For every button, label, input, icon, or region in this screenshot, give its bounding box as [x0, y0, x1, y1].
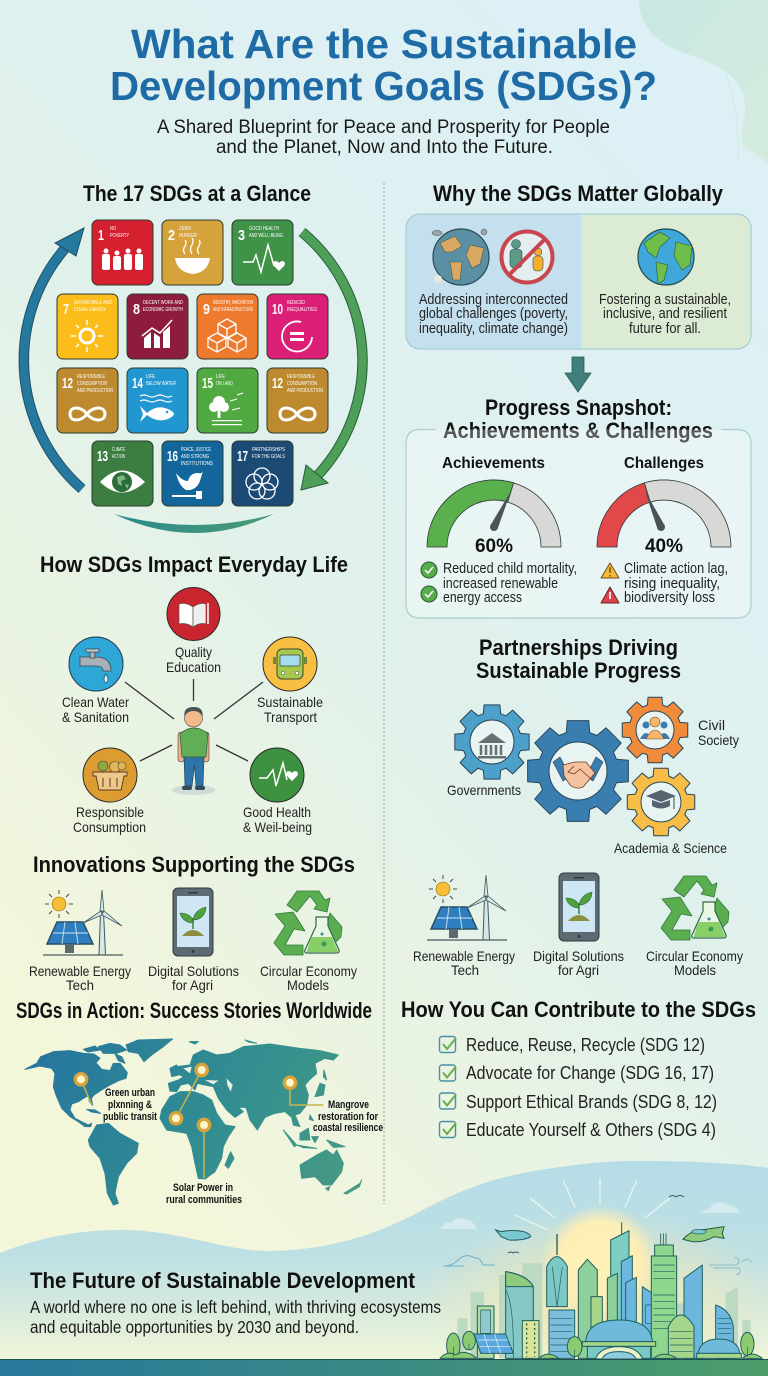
text: fostering a future — [599, 291, 731, 337]
text: addressing challenges — [419, 291, 568, 337]
icon: renewable energy — [427, 875, 507, 940]
label: renewable energy: Renewable Energy — [413, 948, 515, 964]
clouds and birds — [441, 1202, 740, 1229]
label: digital solutions: Digital Solutions — [533, 948, 624, 964]
plane: left — [496, 1230, 531, 1240]
label: good health: Good Health — [243, 804, 311, 820]
label: responsible consumption: Responsible — [76, 804, 144, 820]
label: sustainable transport — [257, 694, 323, 725]
text: fostering a future: Fostering a sustainable, — [599, 291, 731, 308]
label: good health — [243, 804, 312, 835]
tile: SDG 7: CLEAN ENERGY — [74, 307, 107, 313]
title: What Are the Sustainable — [131, 21, 637, 67]
tile: SDG 7: AFFORDABLE AND — [74, 300, 112, 306]
gauge: challenges — [597, 455, 731, 557]
icon: person — [172, 707, 216, 795]
label: circular economy: Models — [287, 977, 329, 993]
label: circular economy — [646, 948, 743, 978]
list: achievements — [421, 560, 577, 606]
tile: SDG 3 — [232, 220, 293, 285]
callout: mangrove restoration: coastal resilience — [313, 1122, 383, 1134]
tile: SDG 12: 12 — [62, 375, 73, 392]
heading: Partnerships: Partnerships Driving — [479, 635, 678, 660]
text: fostering a future: inclusive, and resilient — [603, 305, 728, 322]
list: challenges: Climate action lag, — [624, 560, 728, 577]
tile: SDG 16: INSTITUTIONS — [181, 461, 214, 467]
callout: green urban planning: Green urban — [105, 1087, 155, 1099]
icon: clean water — [69, 637, 123, 691]
city buildings — [440, 1222, 762, 1358]
icon: healthy globe — [638, 229, 694, 285]
tile: SDG 1: POVERTY — [110, 233, 130, 239]
tile: SDG 13: CLIMATE — [112, 447, 125, 453]
tile: SDG 15: LIFE — [216, 374, 226, 380]
footer: sun and city skyline — [420, 1178, 768, 1376]
icon: digital solutions — [559, 873, 599, 941]
label: sustainable transport: Sustainable — [257, 694, 323, 710]
arrow: bottom arc — [114, 514, 274, 533]
tile: SDG 1: 1 — [98, 227, 104, 244]
list: challenges: rising inequality, — [624, 575, 720, 592]
tile: SDG 12 repeated: 12 — [272, 375, 283, 392]
panel: innovations — [29, 888, 357, 993]
icon: sustainable transport — [263, 637, 317, 691]
callout: mangrove restoration — [313, 1099, 383, 1134]
text: fostering a future: future for all. — [629, 320, 701, 337]
tile: SDG 2: ZERO — [179, 226, 191, 232]
map: location pins — [75, 1064, 296, 1131]
callout: green urban planning: public transit — [103, 1111, 157, 1123]
label: civil society: Society — [698, 732, 739, 748]
arrow: down — [565, 357, 591, 392]
tile: SDG 7: 7 — [63, 301, 69, 318]
label: academia: Academia & Science — [614, 840, 727, 856]
map: Americas and Greenland — [25, 1039, 173, 1205]
tile: SDG 16: PEACE, JUSTICE — [181, 447, 211, 453]
list: contribution checklist: Advocate for Change (SDG 16, 17) — [466, 1062, 714, 1083]
label: clean water: & Sanitation — [62, 709, 129, 725]
tile: SDG 12 repeated: RESPONSIBLE — [287, 374, 316, 380]
label: circular economy: Circular Economy — [260, 963, 357, 979]
label: renewable energy — [413, 948, 515, 978]
heading: Why the SDGs Matter Globally: Why the SDGs Matter Globally — [433, 181, 724, 206]
text: addressing challenges: inequality, climate change) — [419, 320, 568, 337]
label: good health: & Weil-being — [243, 819, 312, 835]
tile: SDG 10: REDUCED — [287, 300, 305, 306]
panel: 17 SDGs tile cycle — [24, 220, 363, 533]
tile: SDG 2 — [162, 220, 223, 285]
callout: solar power — [166, 1182, 242, 1206]
label: renewable energy: Tech — [66, 977, 94, 993]
tile: SDG 14: 14 — [132, 375, 143, 392]
heading: Progress Snapshot: Progress Snapshot: — [485, 395, 672, 420]
label: digital solutions — [533, 948, 624, 978]
list: challenges — [601, 560, 728, 606]
tile: SDG 13: 13 — [97, 448, 108, 465]
map: Africa, Eurasia and Oceania — [160, 1040, 362, 1194]
tile: SDG 12: RESPONSIBLE — [77, 374, 106, 380]
icon: renewable energy — [43, 890, 123, 955]
icon: troubled globe — [432, 229, 489, 285]
plane: right — [683, 1227, 724, 1242]
footer: body text — [30, 1297, 441, 1337]
gauge: achievements: Achievements — [442, 455, 545, 472]
tile: SDG 16: AND STRONG — [181, 454, 209, 460]
label: digital solutions — [148, 963, 239, 993]
decorative corner blob — [639, 0, 768, 163]
tile: SDG 3: GOOD HEALTH — [249, 226, 279, 232]
heading: Partnerships: Sustainable Progress — [476, 658, 681, 683]
icon: quality education — [167, 588, 220, 640]
icon: digital solutions — [173, 888, 213, 956]
tile: SDG 14: LIFE — [146, 374, 156, 380]
callout: solar power: rural communities — [166, 1194, 242, 1206]
tile: SDG 12 repeated: AND PRODUCTION — [287, 388, 323, 394]
tile: SDG 2: HUNGER — [179, 233, 197, 239]
map: connector lines — [81, 1070, 323, 1178]
tile: SDG 13 — [92, 441, 153, 506]
label: civil society — [698, 717, 739, 748]
arrow: green cycle arrow — [301, 232, 363, 490]
tile: SDG 3: 3 — [238, 227, 245, 244]
tile: SDG 1 — [92, 220, 153, 285]
callout: green urban planning — [103, 1087, 157, 1123]
label: renewable energy — [29, 963, 131, 993]
tile: SDG 1: NO — [110, 226, 116, 232]
tile: SDG 10: INEQUALITIES — [287, 307, 318, 313]
tile: SDG 9 — [197, 294, 258, 359]
label: renewable energy: Renewable Energy — [29, 963, 131, 979]
label: quality education: Education — [166, 659, 221, 675]
heading: Innovations Supporting the SDGs: Innovations Supporting the SDGs — [33, 852, 355, 877]
list: achievements: Reduced child mortality, — [443, 560, 577, 577]
tile: SDG 7 — [57, 294, 118, 359]
heading: Progress Snapshot: Achievements & Challenges — [443, 418, 713, 443]
label: clean water: Clean Water — [62, 694, 129, 710]
tile: SDG 8: DECENT WORK AND — [143, 300, 183, 306]
label: quality education: Quality — [175, 644, 212, 660]
tile: SDG 16: 16 — [167, 448, 178, 465]
callout: mangrove restoration: Mangrove — [328, 1099, 369, 1111]
tile: SDG 10 — [267, 294, 328, 359]
label: clean water — [62, 694, 129, 725]
footer: body text: and equitable opportunities by 2030 and beyond. — [30, 1317, 359, 1337]
icon: circular economy — [661, 876, 729, 940]
tile: SDG 17: 17 — [237, 448, 248, 465]
title: Development Goals (SDGs)? — [110, 63, 657, 109]
tile: SDG 12: AND PRODUCTION — [77, 388, 113, 394]
tile: SDG 12 repeated: CONSUMPTION — [287, 381, 317, 387]
tile: SDG 17 — [232, 441, 293, 506]
tile: SDG 9: AND INFRASTRUCTURE — [213, 307, 253, 313]
label: circular economy: Circular Economy — [646, 948, 743, 964]
footer: wave background — [0, 1161, 768, 1376]
label: digital solutions: for Agri — [172, 977, 213, 993]
gear: centre handshake — [528, 721, 628, 821]
text: addressing challenges: Addressing interconnected — [419, 291, 568, 308]
tile: SDG 13: ACTION — [112, 454, 125, 460]
list: achievements: increased renewable — [443, 575, 558, 592]
tile: SDG 9: INDUSTRY, INNOVATION — [213, 300, 253, 306]
icon: responsible consumption — [83, 748, 137, 802]
callout: mangrove restoration: restoration for — [318, 1111, 379, 1123]
heading: SDGs in Action: SDGs in Action: Success Stories Worldwide — [16, 998, 372, 1023]
list: contribution checklist: Support Ethical Brands (SDG 8, 12) — [466, 1091, 717, 1112]
callout: solar power: Solar Power in — [173, 1182, 233, 1194]
list: achievements: energy access — [443, 589, 522, 606]
label: sustainable transport: Transport — [264, 709, 317, 725]
panel: everyday life diagram — [62, 588, 323, 835]
tile: SDG 2: 2 — [168, 227, 175, 244]
callout: green urban planning: plxnning & — [108, 1099, 152, 1111]
tile: SDG 9: 9 — [203, 301, 210, 318]
heading: How SDGs Impact Everyday Life: How SDGs Impact Everyday Life — [40, 552, 348, 577]
tile: SDG 12 — [57, 368, 118, 433]
gauge: challenges: Challenges — [624, 455, 704, 472]
label: responsible consumption: Consumption — [73, 819, 146, 835]
panel: why SDGs matter — [406, 214, 751, 349]
gauge: challenges: 40% — [645, 536, 683, 557]
tile: SDG 17: PARTNERSHIPS — [252, 447, 286, 453]
arrow: blue cycle arrow — [24, 228, 84, 489]
gear: academia — [627, 768, 695, 836]
footer: body text: A world where no one is left behind, with thriving ecosystems — [30, 1297, 441, 1317]
subtitle — [157, 117, 610, 158]
gear: civil society — [622, 697, 688, 763]
tile: SDG 14 — [127, 368, 188, 433]
icon: inequality prohibition — [502, 232, 552, 282]
footer: bottom bar — [0, 1359, 768, 1376]
subtitle: and the Planet, Now and Into the Future. — [216, 137, 553, 158]
label: civil society: Civil — [698, 717, 725, 733]
label: circular economy — [260, 963, 357, 993]
tile: SDG 12: CONSUMPTION — [77, 381, 107, 387]
list: contribution checklist: Reduce, Reuse, Recycle (SDG 12) — [466, 1034, 705, 1055]
label: governments: Governments — [447, 782, 521, 798]
label: responsible consumption — [73, 804, 146, 835]
chart: world map with success stories — [25, 1039, 383, 1206]
gear: governments — [455, 705, 529, 779]
tile: SDG 3: AND WELL-BEING — [249, 233, 283, 239]
panel: innovations repeat — [413, 873, 743, 978]
tile: SDG 12 repeated — [267, 368, 328, 433]
label: circular economy: Models — [674, 962, 716, 978]
tile: SDG 8: ECONOMIC GROWTH — [143, 307, 183, 313]
list: challenges: biodiversity loss — [624, 589, 715, 606]
label: quality education — [166, 644, 221, 675]
list: contribution checklist: Educate Yourself & Others (SDG 4) — [466, 1119, 716, 1140]
label: digital solutions: for Agri — [558, 962, 599, 978]
icon: good health — [250, 748, 304, 802]
tile: SDG 16 — [162, 441, 223, 506]
text: addressing challenges: global challenges (poverty, — [419, 305, 568, 322]
panel: progress snapshot — [406, 430, 751, 618]
subtitle: A Shared Blueprint for Peace and Prosperity for People — [157, 117, 610, 138]
label: renewable energy: Tech — [451, 962, 479, 978]
heading: Partnerships — [476, 635, 681, 683]
diagram: partnership gears — [447, 697, 739, 856]
tile: SDG 15 — [197, 368, 258, 433]
heading: Progress Snapshot — [443, 395, 713, 443]
tile: SDG 8 — [127, 294, 188, 359]
footer: heading: The Future of Sustainable Development — [30, 1268, 416, 1293]
tile: SDG 15: ON LAND — [216, 381, 233, 387]
icon: circular economy — [274, 891, 342, 955]
heading: The 17 SDGs at a Glance: The 17 SDGs at a Glance — [83, 181, 311, 206]
gauge: achievements: 60% — [475, 536, 513, 557]
list: contribution checklist — [440, 1034, 717, 1140]
title — [110, 21, 657, 109]
tile: SDG 8: 8 — [133, 301, 140, 318]
tile: SDG 17: FOR THE GOALS — [252, 454, 286, 460]
tile: SDG 15: 15 — [202, 375, 213, 392]
gauge: achievements — [427, 455, 561, 557]
label: digital solutions: Digital Solutions — [148, 963, 239, 979]
tile: SDG 14: BELOW WATER — [146, 381, 176, 387]
tile: SDG 10: 10 — [272, 301, 283, 318]
